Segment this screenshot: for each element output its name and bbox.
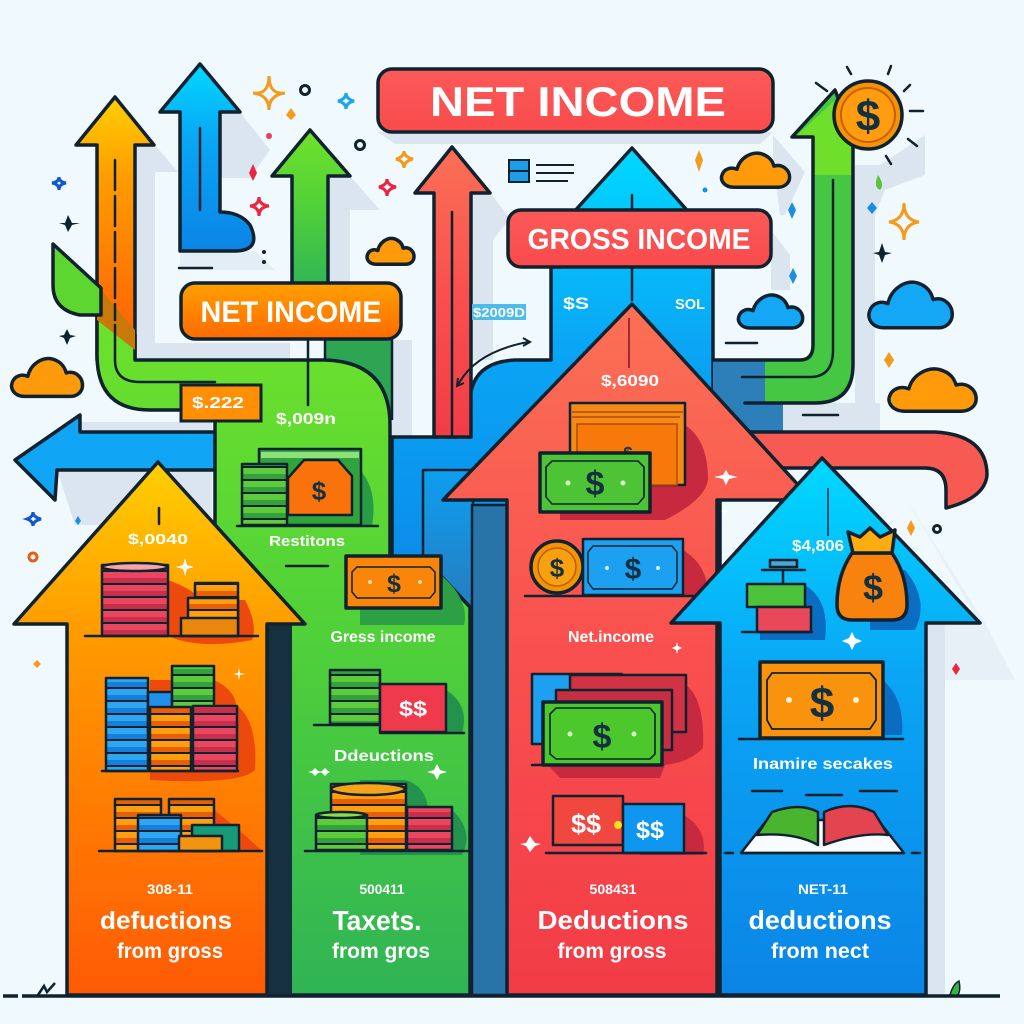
panel: orange left arrow column <box>14 462 305 995</box>
label: blue panel figures <box>563 294 705 313</box>
icon: money bag: $ <box>863 567 883 608</box>
leaf <box>53 244 101 315</box>
icon: coin and blue bill: $ <box>550 553 565 583</box>
icon: orange bills and green bill <box>540 403 708 520</box>
icon: stack of bills <box>532 674 703 778</box>
arrow: blue up with curled foot <box>160 64 254 268</box>
icon: coin and blue bill: $ <box>625 553 642 586</box>
text: orange column footer: from gross <box>117 940 223 963</box>
panel: green middle column <box>53 160 480 995</box>
text: blue column footer: NET-11 <box>798 881 848 897</box>
icon: red and orange stacks <box>85 563 258 644</box>
arrow: central blue house behind gross income label <box>392 148 783 640</box>
icon: open book <box>725 806 920 853</box>
arrow: orange up <box>76 97 154 360</box>
icon: curved double arrow <box>457 338 530 386</box>
icons: clouds <box>12 153 976 411</box>
icon: orange bill: $ <box>810 679 834 728</box>
text: red column footer <box>538 881 688 963</box>
icon: orange bill <box>739 662 903 739</box>
heading: top net income banner: NET INCOME <box>430 78 726 125</box>
text: green column footer <box>332 881 430 963</box>
price tag: $.222 <box>192 395 244 412</box>
heading: orange net income label: NET INCOME <box>200 296 382 329</box>
text: deductions caption: Ddeuctions <box>334 748 434 765</box>
text: insurance caption: Inamire secakes <box>753 756 893 773</box>
icon: green stack and red tag <box>314 670 464 733</box>
icon: mixed coin stack <box>305 780 480 855</box>
icon: coin with dollar: $ <box>856 92 880 141</box>
heading: orange net income label <box>181 283 401 339</box>
text: orange column footer: defuctions <box>100 907 232 935</box>
text: red column footer: Deductions <box>538 905 688 935</box>
text: gress income: Gress income <box>330 629 436 646</box>
icon: coin and blue bill <box>525 539 708 596</box>
icon: stack of bills: $ <box>593 718 612 756</box>
icon: coin with dollar <box>816 66 923 164</box>
text: net income caption: Net.income <box>568 629 654 646</box>
text: orange column footer: 308-11 <box>147 881 193 897</box>
icons: sparkles and dots <box>27 76 960 852</box>
arrow: right curved red <box>745 432 987 508</box>
icon: green stack and red tag: $$ <box>399 698 427 721</box>
icon: orange bills and green bill: $ <box>586 465 605 503</box>
arrow: left blue <box>15 415 225 500</box>
text: red column footer: from gross <box>558 940 666 963</box>
arrow: tall red up <box>415 147 490 437</box>
text: restitons: Restitons <box>269 533 345 550</box>
heading: top net income banner <box>378 69 773 132</box>
text: amount: $4,806 <box>792 538 844 555</box>
icon: orange bill <box>346 556 465 625</box>
icon: orange bill: $ <box>387 570 401 598</box>
text: amount: $,0040 <box>128 531 188 548</box>
text: green column footer: 500411 <box>360 881 405 897</box>
arrow: right green with coin <box>713 66 923 415</box>
icon: blue green orange red stacks <box>102 666 255 781</box>
label: blue panel figures: SOL <box>675 296 705 313</box>
text: blue column footer: from nect <box>771 940 869 963</box>
text: green column footer: Taxets. <box>332 905 422 936</box>
text: blue column footer: deductions <box>748 905 892 935</box>
price tag <box>181 385 261 421</box>
column: steel blue divider <box>472 505 507 995</box>
text: green column footer: from gros <box>332 940 430 963</box>
panel: blue right arrow column <box>671 458 980 995</box>
icon: money bag <box>837 528 921 630</box>
heading: gross income banner <box>508 210 771 267</box>
icon: red and blue dollar boxes <box>546 796 706 855</box>
icon: green bills and orange tag <box>237 449 378 526</box>
text: amount: $,009n <box>276 411 336 428</box>
icon: small books and press <box>742 560 826 640</box>
arrow: green up <box>272 130 350 290</box>
icon: small list glyph <box>509 160 574 182</box>
ground line <box>3 981 1000 996</box>
icon: low mixed stacks <box>99 799 262 851</box>
heading: gross income banner: GROSS INCOME <box>528 224 750 256</box>
icon: green bills and orange tag: $ <box>312 476 327 506</box>
icon: orange bills and green bill: $ <box>624 445 633 462</box>
text: orange column footer <box>100 881 232 963</box>
panel: red large arrow column <box>443 304 812 995</box>
text: amount: $,6090 <box>601 373 659 390</box>
label: blue panel figures: $S <box>563 294 589 313</box>
text: red column footer: 508431 <box>590 881 637 897</box>
text: blue column footer <box>748 881 892 963</box>
small blue figure tag: $2009D <box>473 305 525 320</box>
icon: red and blue dollar boxes: $$ <box>636 817 665 844</box>
icon: red and blue dollar boxes: $$ <box>571 809 601 839</box>
